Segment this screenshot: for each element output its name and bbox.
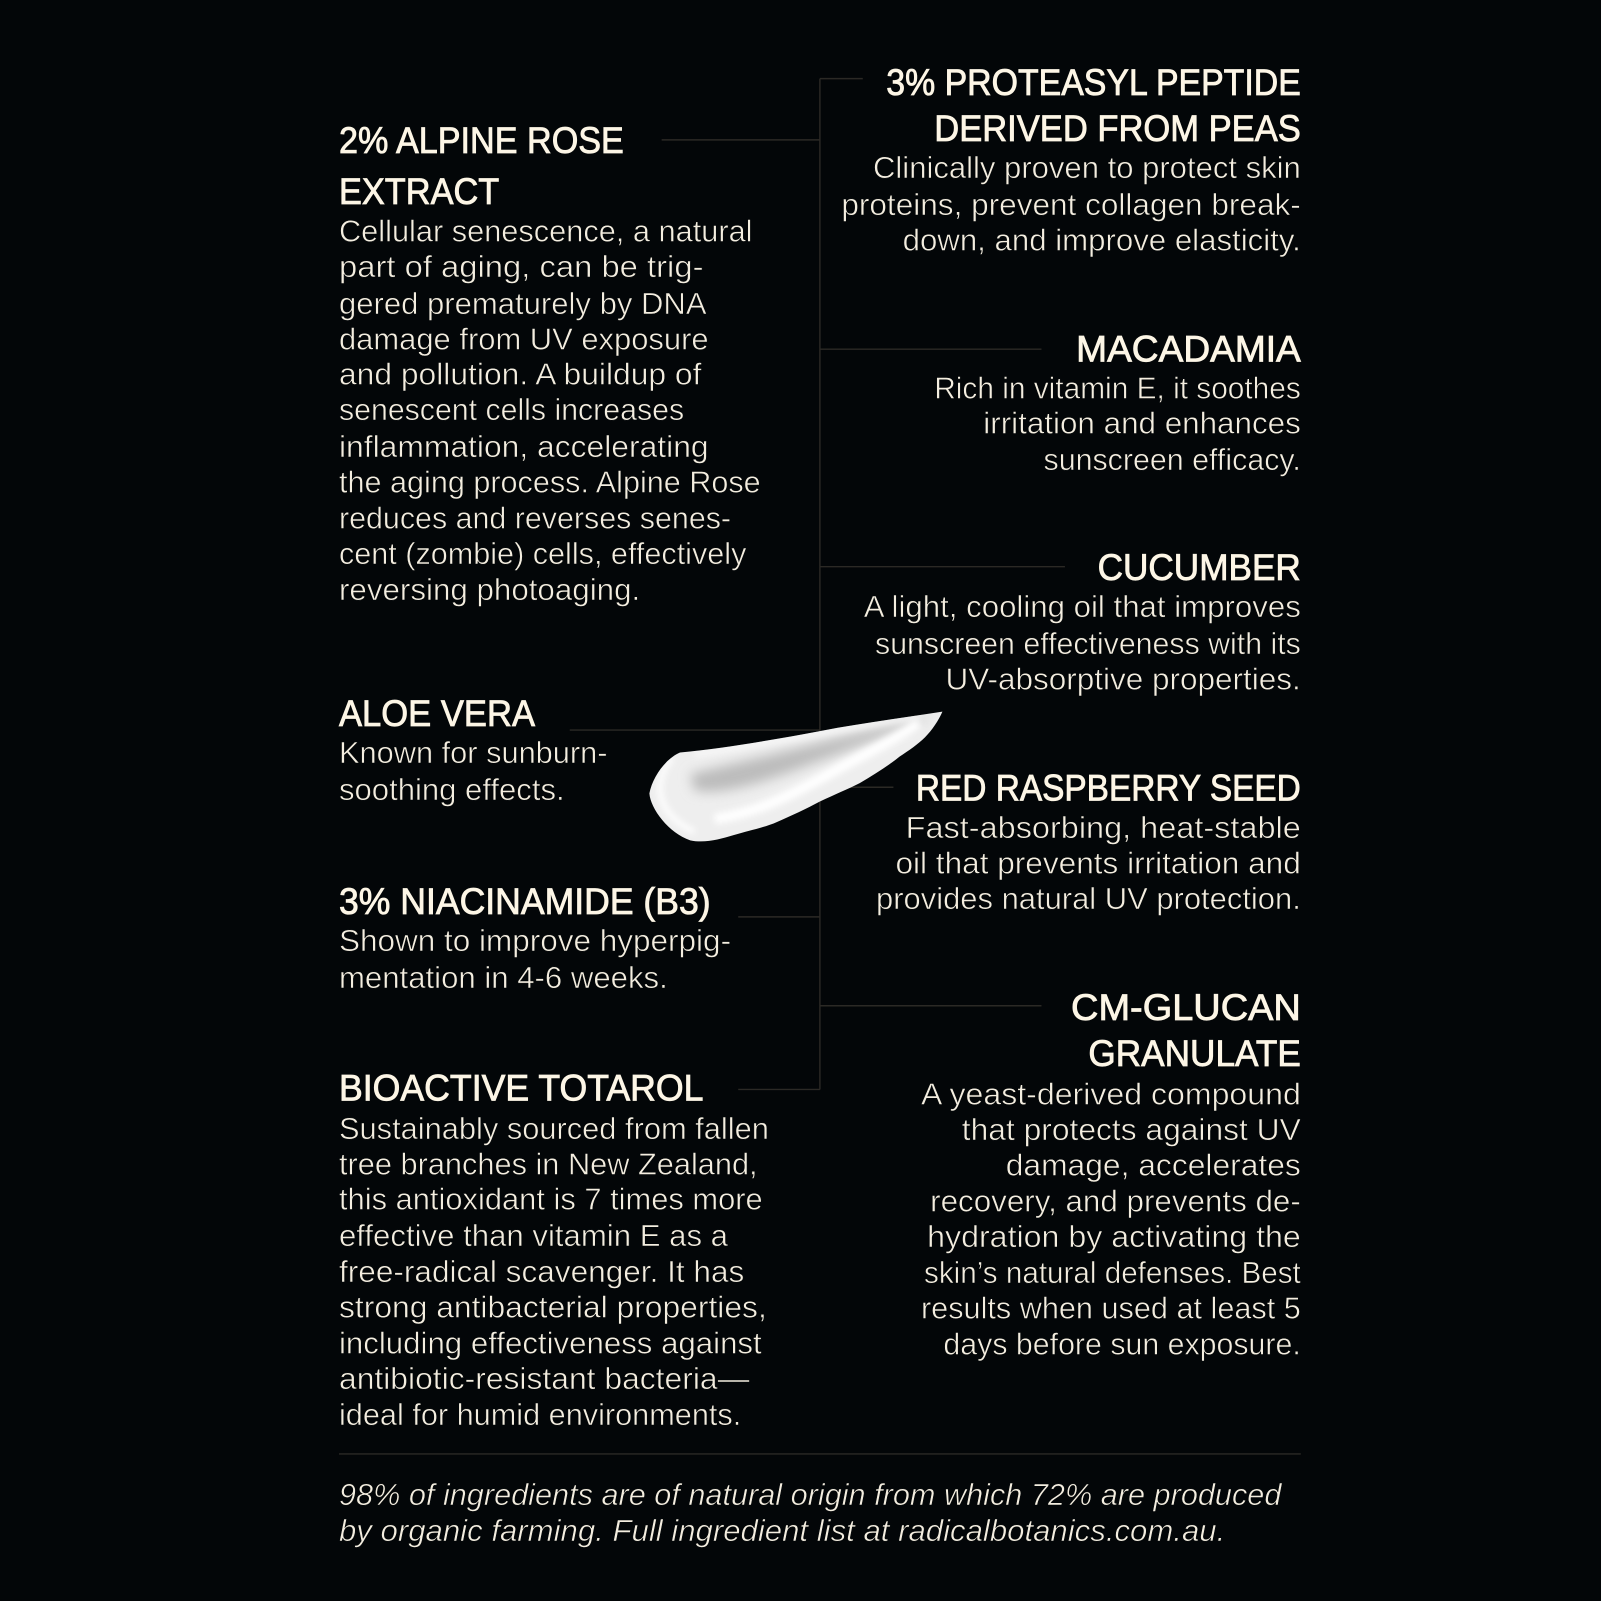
body text: the aging process. Alpine Rose — [339, 467, 761, 500]
body text: A light, cooling oil that improves — [864, 591, 1301, 624]
body text: UV-absorptive properties. — [945, 664, 1301, 697]
footnote: 98% of ingredients are of natural origin from which 72% are produced — [339, 1479, 1283, 1512]
body text: Rich in vitamin E, it soothes — [934, 373, 1301, 406]
ingredient: CM-Glucan Granulate — [921, 987, 1301, 1361]
body text: A yeast-derived compound — [921, 1078, 1301, 1111]
heading: 2% ALPINE ROSE — [339, 120, 624, 161]
body text: this antioxidant is 7 times more — [339, 1183, 763, 1216]
body text: gered prematurely by DNA — [339, 288, 708, 321]
body text: results when used at least 5 — [921, 1293, 1301, 1326]
body text: effective than vitamin E as a — [339, 1220, 728, 1253]
ingredient: Macadamia — [934, 328, 1301, 477]
illustration: cream smear — [649, 712, 942, 841]
heading: 3% PROTEASYL PEPTIDE — [886, 62, 1301, 103]
body text: cent (zombie) cells, effectively — [339, 538, 746, 571]
connector lines — [570, 79, 1065, 1089]
body text: hydration by activating the — [927, 1221, 1301, 1254]
body text — [339, 1113, 769, 1432]
heading: CUCUMBER — [1098, 547, 1301, 588]
body text: Sustainably sourced from fallen — [339, 1113, 769, 1146]
body text: and pollution. A buildup of — [339, 358, 702, 391]
body text: including effectiveness against — [339, 1327, 762, 1360]
footnote — [339, 1479, 1283, 1548]
body text: mentation in 4-6 weeks. — [339, 962, 668, 995]
body text: reduces and reverses senes- — [339, 502, 731, 535]
body text — [921, 1078, 1301, 1361]
body text: ideal for humid environments. — [339, 1399, 741, 1432]
body text: oil that prevents irritation and — [895, 848, 1301, 881]
body text: recovery, and prevents de- — [930, 1185, 1301, 1218]
body text: damage from UV exposure — [339, 324, 709, 357]
body text: tree branches in New Zealand, — [339, 1149, 758, 1182]
heading: CM-GLUCAN — [1071, 987, 1301, 1028]
body text: Cellular senescence, a natural — [339, 215, 753, 248]
ingredient: Cucumber — [864, 547, 1301, 697]
heading: RED RASPBERRY SEED — [916, 768, 1301, 809]
body text — [339, 737, 608, 807]
ingredient: 2% Alpine Rose Extract — [339, 120, 761, 607]
ingredient: Bioactive Totarol — [339, 1068, 769, 1432]
heading — [339, 120, 624, 212]
body text: antibiotic-resistant bacteria— — [339, 1363, 750, 1396]
body text: Fast-absorbing, heat-stable — [906, 812, 1301, 845]
body text: free-radical scavenger. It has — [339, 1256, 744, 1289]
heading: GRANULATE — [1088, 1033, 1301, 1074]
heading: DERIVED FROM PEAS — [934, 108, 1301, 149]
heading — [1071, 987, 1301, 1074]
body text: provides natural UV protection. — [876, 883, 1301, 916]
body text: damage, accelerates — [1006, 1150, 1301, 1183]
footnote: by organic farming. Full ingredient list at radicalbotanics.com.au. — [339, 1515, 1225, 1548]
body text: senescent cells increases — [339, 394, 684, 427]
heading: 3% NIACINAMIDE (B3) — [339, 881, 711, 922]
heading: MACADAMIA — [1076, 328, 1301, 369]
heading — [886, 62, 1301, 149]
body text: that protects against UV — [962, 1114, 1301, 1147]
body text — [934, 373, 1301, 477]
body text: down, and improve elasticity. — [903, 225, 1301, 258]
body text — [864, 591, 1301, 697]
ingredient: 3% Proteasyl Peptide — [841, 62, 1301, 258]
body text: reversing photoaging. — [339, 574, 640, 607]
body text: Clinically proven to protect skin — [873, 152, 1301, 185]
heading: BIOACTIVE TOTAROL — [339, 1068, 704, 1109]
body text: irritation and enhances — [983, 407, 1301, 440]
body text: part of aging, can be trig- — [339, 251, 704, 284]
body text — [339, 215, 761, 607]
heading: ALOE VERA — [339, 693, 535, 734]
body text: strong antibacterial properties, — [339, 1292, 767, 1325]
divider — [339, 1453, 1301, 1455]
body text — [841, 152, 1301, 258]
body text: sunscreen efficacy. — [1044, 444, 1301, 477]
ingredient: Red Raspberry Seed — [876, 768, 1301, 916]
body text — [339, 925, 731, 995]
body text: inflammation, accelerating — [339, 431, 709, 464]
body text: sunscreen effectiveness with its — [875, 628, 1301, 661]
ingredient: Aloe Vera — [339, 693, 608, 807]
body text — [876, 812, 1301, 916]
ingredient: 3% Niacinamide — [339, 881, 731, 995]
body text: Shown to improve hyperpig- — [339, 925, 731, 958]
body text: Known for sunburn- — [339, 737, 608, 770]
body text: skin’s natural defenses. Best — [924, 1257, 1301, 1290]
body text: soothing effects. — [339, 774, 565, 807]
body text: days before sun exposure. — [943, 1328, 1301, 1361]
body text: proteins, prevent collagen break- — [841, 189, 1301, 222]
heading: EXTRACT — [339, 171, 499, 212]
